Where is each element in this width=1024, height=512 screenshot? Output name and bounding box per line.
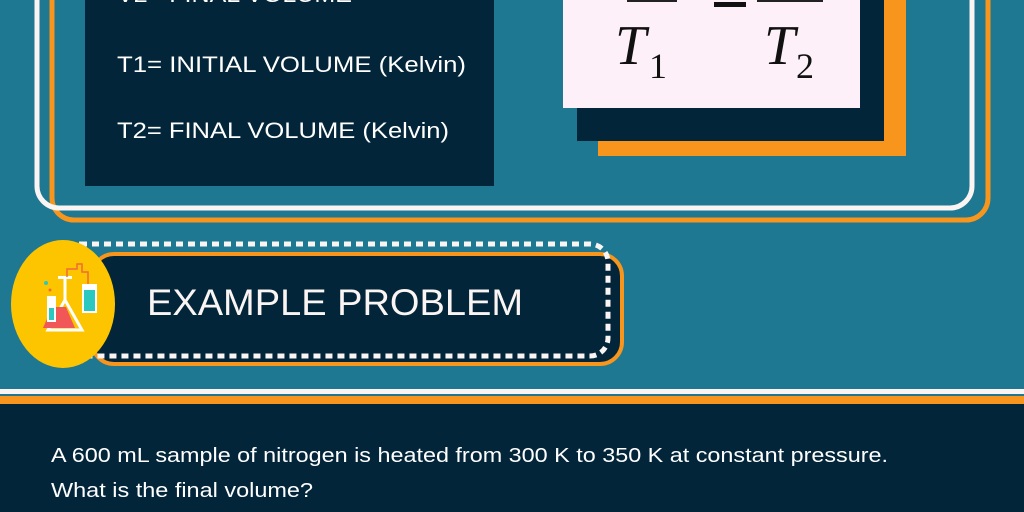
panel: problem statement [0,404,1024,512]
divider stripes [0,389,1024,394]
text: T2 definition: T2= FINAL VOLUME (Kelvin) [117,118,449,143]
heading: example problem banner [11,240,622,368]
panel: variable definitions [85,0,494,186]
text: problem line 1: A 600 mL sample of nitrogen is heated from 300 K to 350 K at constant pressure. [51,445,888,467]
formula: V1/T1 = V2/T2: T [764,15,799,77]
panel: formula card [563,0,906,156]
formula: V1/T1 = V2/T2: 2 [796,46,814,86]
text: problem line 2: What is the final volume? [51,480,313,502]
text: heading: EXAMPLE PROBLEM [147,282,523,323]
text: T1 definition: T1= INITIAL VOLUME (Kelvin) [117,52,466,77]
formula: V1/T1 = V2/T2: T [615,15,650,77]
icon: lab flasks [11,240,115,368]
panel: definitions frame [37,0,988,220]
formula: V1/T1 = V2/T2: 1 [649,46,667,86]
formula: V1/T1 = V2/T2 [615,0,823,86]
